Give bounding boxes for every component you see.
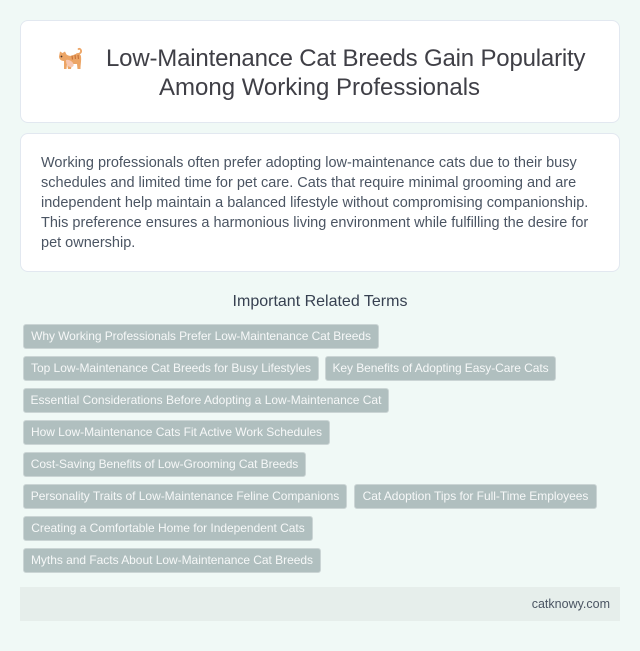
tag 5 [23,420,330,445]
summary card [20,133,620,272]
tag 1: Why Working Professionals Prefer Low-Maintenance Cat Breeds [31,329,371,343]
title line 1: Low-Maintenance Cat Breeds Gain Popularity [106,45,585,72]
summary text: independent help maintain a balanced lifestyle without compromising companionship. [41,195,588,211]
tag 9: Creating a Comfortable Home for Independent Cats [31,521,305,535]
summary text: Working professionals often prefer adopting low-maintenance cats due to their busy [41,155,577,171]
tag 1 [23,324,379,349]
footer site name: catknowy.com [532,597,610,611]
tag 4 [23,388,389,413]
summary text [41,155,588,251]
tag 10: Myths and Facts About Low-Maintenance Cat Breeds [31,553,313,567]
title card [20,20,620,123]
section heading: Important Related Terms [233,293,407,310]
tag list [23,324,597,573]
tag 3 [325,356,556,381]
tag 5: How Low-Maintenance Cats Fit Active Work Schedules [31,425,322,439]
tag 7 [23,484,347,509]
tag 7: Personality Traits of Low-Maintenance Feline Companions [31,489,339,503]
title line 2: Among Working Professionals [159,74,480,101]
summary text: schedules and limited time for pet care. Cats that require minimal grooming and are [41,175,576,191]
tag 8 [354,484,597,509]
tag 4: Essential Considerations Before Adopting a Low-Maintenance Cat [31,393,381,407]
tag 8: Cat Adoption Tips for Full-Time Employees [363,489,588,503]
footer bar [20,587,620,621]
icon: cat [59,48,82,69]
tag 2: Top Low-Maintenance Cat Breeds for Busy Lifestyles [31,361,311,375]
tag 6 [23,452,306,477]
tag 9 [23,516,313,541]
tag 2 [23,356,319,381]
tag 3: Key Benefits of Adopting Easy-Care Cats [332,361,549,375]
summary text: This preference ensures a harmonious living environment while fulfilling the desire for [41,215,588,231]
tag 6: Cost-Saving Benefits of Low-Grooming Cat Breeds [31,457,298,471]
tag 10 [23,548,321,573]
summary text: pet ownership. [41,235,135,251]
